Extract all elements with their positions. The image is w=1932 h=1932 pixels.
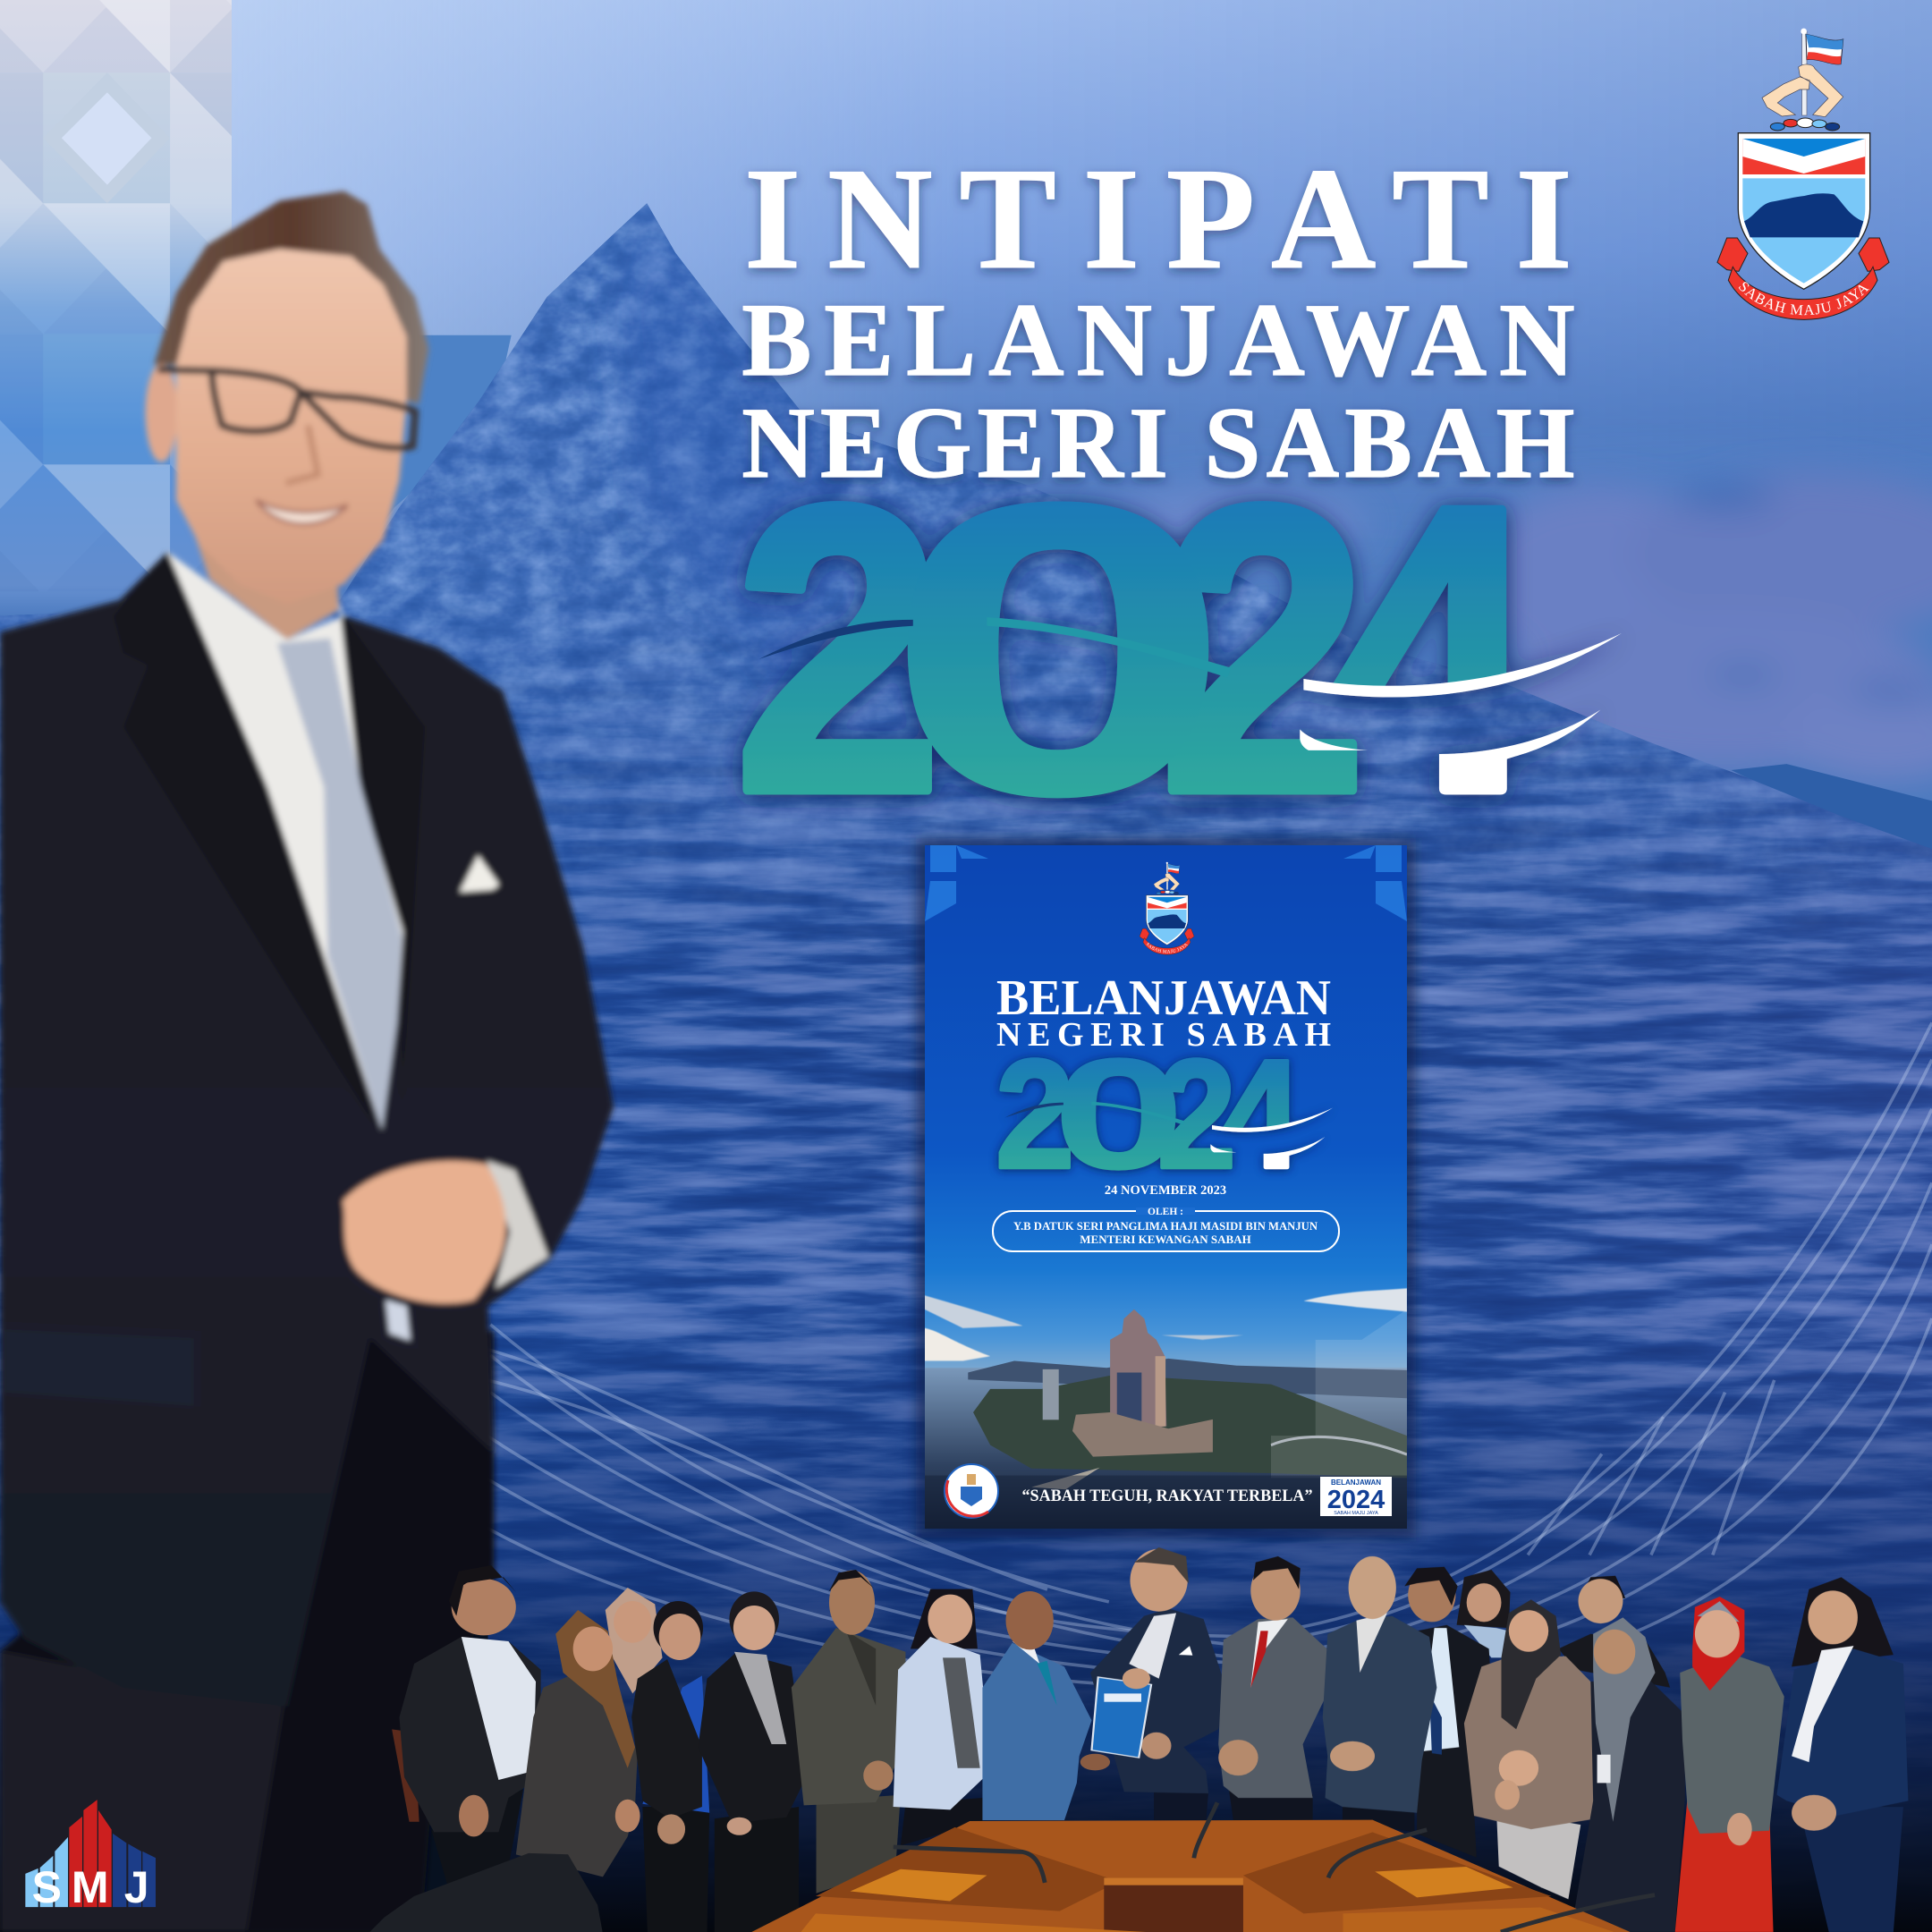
chair xyxy=(369,1853,603,1932)
logo letters: S xyxy=(32,1862,62,1912)
poster details: “SABAH TEGUH, RAKYAT TERBELA” xyxy=(1022,1487,1313,1505)
ear xyxy=(146,363,177,462)
suit jacket xyxy=(0,552,614,1707)
2024 logo xyxy=(734,419,1622,881)
ribbon: SABAH MAJU JAYA xyxy=(1739,282,1869,315)
SMJ logo xyxy=(25,1800,156,1912)
head xyxy=(176,249,407,604)
title: NEGERI SABAH xyxy=(741,387,1575,499)
decorative tile pattern xyxy=(0,0,232,616)
woman in leopard scarf xyxy=(516,1610,640,1877)
poster budget logo: SABAH MAJU JAYA xyxy=(1334,1511,1378,1516)
woman in tan blazer xyxy=(1464,1599,1596,1899)
woman in floral dress xyxy=(1571,1617,1685,1932)
logo letters: J xyxy=(124,1862,149,1912)
2024 logo: 0 xyxy=(886,419,1232,881)
poster photo xyxy=(925,1288,1407,1530)
poster budget logo xyxy=(1320,1477,1392,1516)
poster crest xyxy=(1140,862,1194,955)
table inlays xyxy=(816,1827,1551,1913)
beads xyxy=(1770,118,1840,131)
poster background xyxy=(925,845,1407,1368)
flag and pole xyxy=(1801,29,1843,115)
man with red tie xyxy=(1218,1556,1330,1820)
left trouser leg xyxy=(0,1651,284,1932)
budget book xyxy=(1091,1668,1151,1758)
background sky xyxy=(0,0,1932,801)
mouth xyxy=(257,500,347,524)
logo letters: M xyxy=(72,1862,109,1912)
poster details: 24 NOVEMBER 2023 xyxy=(1105,1183,1226,1198)
poster budget logo: 2024 xyxy=(1327,1486,1385,1514)
man in blue suit xyxy=(982,1591,1110,1820)
title xyxy=(741,139,1575,499)
group photo xyxy=(392,1547,1908,1932)
clouds xyxy=(1097,474,1932,783)
fist xyxy=(343,1161,505,1303)
staff right half xyxy=(1090,1547,1908,1932)
ribbon xyxy=(1716,238,1889,320)
poster xyxy=(916,838,1416,1538)
man with navy tie xyxy=(1404,1567,1491,1858)
hair xyxy=(154,191,428,404)
minister xyxy=(1090,1547,1226,1820)
logo letters xyxy=(32,1862,149,1912)
crest xyxy=(1716,29,1889,320)
man in grey suit xyxy=(792,1570,905,1894)
shield xyxy=(1738,133,1870,289)
2024 logo: 4 xyxy=(1328,423,1541,877)
back row women xyxy=(1457,1570,1670,1688)
arms xyxy=(1762,64,1843,117)
staff left half xyxy=(392,1565,1110,1932)
woman in tan hijab xyxy=(606,1588,663,1693)
poster title: NEGERI SABAH xyxy=(996,1016,1331,1054)
microphones xyxy=(894,1802,1655,1932)
woman in black jacket xyxy=(698,1591,806,1932)
title: BELANJAWAN xyxy=(741,283,1575,398)
dark backdrop edge xyxy=(385,1540,488,1932)
poster details xyxy=(993,1183,1339,1505)
2024 logo: 2 xyxy=(1159,422,1368,877)
tie xyxy=(277,639,402,1130)
poster details: MENTERI KEWANGAN SABAH xyxy=(1080,1233,1251,1246)
title: INTIPATI xyxy=(744,139,1572,300)
poster corner tiles xyxy=(925,845,1407,921)
poster details: Y.B DATUK SERI PANGLIMA HAJI MASIDI BIN MANJUN xyxy=(1013,1219,1318,1233)
curved bridge lines xyxy=(487,1022,1932,1690)
poster 2024 logo xyxy=(996,1026,1333,1202)
older man xyxy=(1323,1556,1436,1832)
poster title xyxy=(996,970,1331,1054)
sleeve cuff xyxy=(487,1161,548,1289)
woman in red hijab xyxy=(1675,1597,1784,1932)
shirt xyxy=(167,552,402,1130)
man with lanyard xyxy=(399,1565,541,1890)
lapel shading xyxy=(114,552,425,1127)
woman in blue blouse xyxy=(631,1601,709,1932)
conference table xyxy=(751,1820,1630,1932)
woman in navy suit xyxy=(1776,1577,1908,1932)
neck xyxy=(185,505,339,640)
glasses xyxy=(157,369,415,447)
man portrait xyxy=(0,191,614,1932)
poster round logo xyxy=(945,1464,998,1518)
trousers xyxy=(0,1331,494,1932)
nose shade xyxy=(286,425,318,483)
woman in pale blazer xyxy=(894,1589,991,1845)
logo swoosh xyxy=(759,617,1622,795)
poster details: OLEH : xyxy=(1148,1207,1183,1217)
poster budget logo: BELANJAWAN xyxy=(1331,1479,1381,1487)
distant ridge xyxy=(1731,764,1932,856)
pocket square xyxy=(460,855,499,892)
2024 logo: 2 xyxy=(734,422,943,877)
logo bars xyxy=(25,1800,156,1907)
tie end xyxy=(386,1300,411,1341)
pocket flap xyxy=(4,1329,193,1406)
poster title: BELANJAWAN xyxy=(996,970,1331,1026)
